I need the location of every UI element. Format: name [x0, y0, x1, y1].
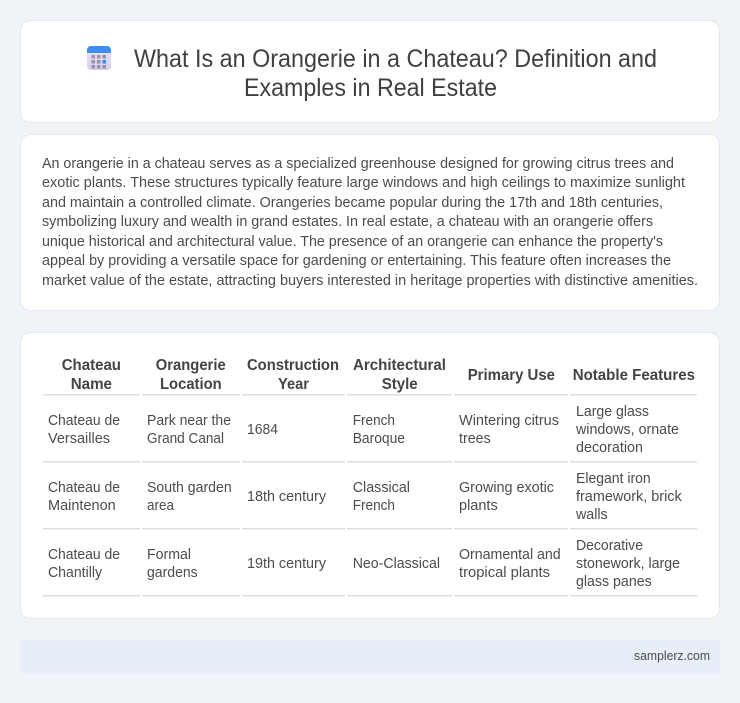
panel: chateau table: [20, 332, 720, 618]
table row: Versailles: Large glass: [576, 404, 649, 420]
table row: Chantilly: Ornamental and: [459, 547, 561, 563]
table row: Versailles: 1684: [247, 422, 278, 438]
table row: Chantilly: gardens: [147, 565, 198, 581]
table row: Maintenon: walls: [575, 507, 608, 523]
table row: Versailles: French: [353, 413, 395, 429]
table row: Versailles: Baroque: [353, 431, 405, 447]
table row: Versailles: Wintering citrus: [459, 413, 559, 429]
table row: Versailles: trees: [459, 431, 491, 447]
panel: description: [20, 134, 720, 310]
table header row: Notable Features: [573, 367, 695, 384]
table row: Chantilly: 19th century: [247, 556, 327, 572]
table row: Chantilly: Chantilly: [48, 565, 103, 581]
table row: Versailles: decoration: [576, 440, 643, 456]
table row: Maintenon: 18th century: [247, 489, 327, 505]
title: What Is an Orangerie in a Chateau? Definition and: [134, 45, 657, 73]
table row: Versailles: Park near the: [147, 413, 231, 429]
description text block: appeal by providing a versatile space for gardening or entertaining. This feature often increases the: [42, 253, 671, 269]
description text block: and maintain a controlled climate. Orangeries became popular during the 17th and 18th centuries,: [42, 195, 663, 211]
table row: Chantilly: Decorative: [576, 538, 643, 554]
table header row: Name: [71, 376, 112, 393]
title: [134, 45, 657, 102]
table row: Chantilly: Neo-Classical: [353, 556, 440, 572]
table row: Maintenon: plants: [459, 498, 498, 514]
table row: Versailles: Grand Canal: [147, 431, 224, 447]
table row: Chantilly: Formal: [147, 547, 191, 563]
table row: Versailles: Chateau de: [48, 413, 120, 429]
footer bar: [20, 640, 720, 673]
description text block: An orangerie in a chateau serves as a specialized greenhouse designed for growing citrus trees and: [42, 156, 674, 172]
table row: Maintenon: South garden: [147, 480, 232, 496]
icon: calendar: [87, 46, 111, 70]
table header row: Primary Use: [468, 367, 555, 384]
table row: Versailles: windows, ornate: [575, 422, 679, 438]
table row: Maintenon: Maintenon: [48, 498, 116, 514]
table row: Chantilly: glass panes: [576, 574, 652, 590]
table header row: Location: [160, 376, 222, 393]
table header row: Year: [278, 376, 309, 393]
title: Examples in Real Estate: [244, 74, 497, 102]
description text block: unique historical and architectural value. The presence of an orangerie can enhance the property's: [42, 234, 663, 250]
table row: Chantilly: Chateau de: [48, 547, 120, 563]
table row: Maintenon: Growing exotic: [459, 480, 554, 496]
table header row: Chateau: [62, 357, 121, 374]
description text block: exotic plants. These structures typically feature large windows and high ceilings to maximize sunlight: [42, 175, 685, 191]
description text block: symbolizing luxury and wealth in grand estates. In real estate, a chateau with an orangerie offers: [42, 214, 653, 230]
table row: Maintenon: area: [147, 498, 174, 514]
footer bar: samplerz.com: [634, 649, 710, 663]
table row: Versailles: Versailles: [48, 431, 110, 447]
table header row: Architectural: [353, 357, 446, 374]
table row: Maintenon: [43, 471, 697, 530]
description text block: [42, 156, 698, 289]
table row: Maintenon: Classical: [353, 480, 410, 496]
table row: Chantilly: [43, 538, 697, 596]
table row: Maintenon: French: [353, 498, 395, 514]
table header row: Construction: [247, 357, 339, 374]
table row: Chantilly: tropical plants: [459, 565, 550, 581]
table row: Versailles: [43, 404, 697, 462]
table header row: Orangerie: [156, 357, 226, 374]
table header row: [43, 357, 697, 396]
table row: Maintenon: Elegant iron: [576, 471, 651, 487]
table row: Maintenon: Chateau de: [48, 480, 120, 496]
table row: Maintenon: framework, brick: [576, 489, 682, 505]
table row: Chantilly: stonework, large: [576, 556, 680, 572]
panel: title card: [20, 20, 720, 122]
table header row: Style: [382, 376, 418, 393]
description text block: market value of the estate, attracting buyers interested in heritage properties with distinctive amenities.: [42, 273, 698, 289]
